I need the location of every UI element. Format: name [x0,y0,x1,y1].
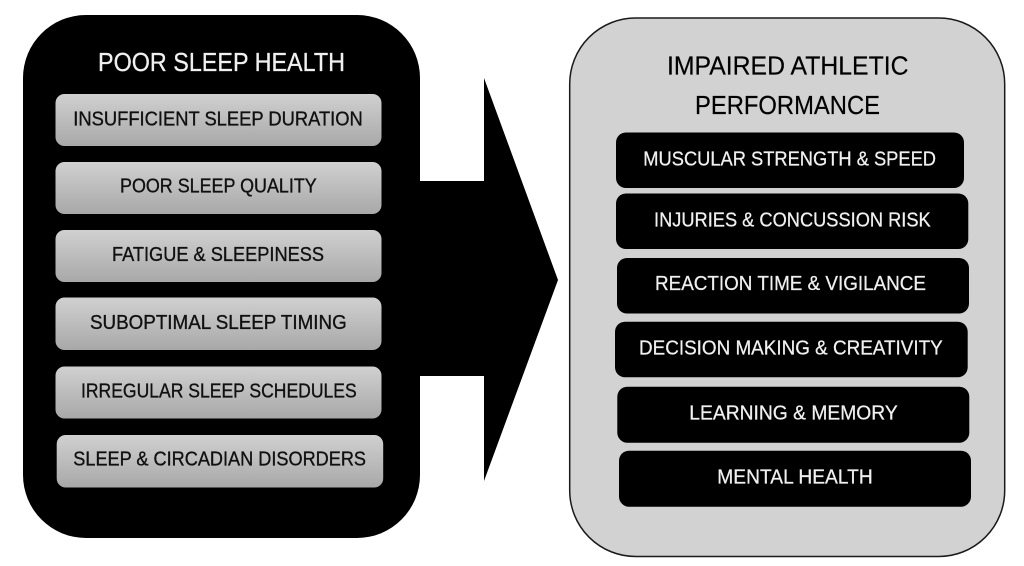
item: injuries and concussion risk: INJURIES & CONCUSSION RISK [654,208,931,231]
item: insufficient sleep duration: INSUFFICIENT SLEEP DURATION [73,108,363,130]
item: sleep and circadian disorders: SLEEP & CIRCADIAN DISORDERS [73,448,366,471]
item: poor sleep quality [56,162,382,214]
item: learning and memory: LEARNING & MEMORY [689,401,898,424]
item: poor sleep quality: POOR SLEEP QUALITY [120,174,317,198]
item: learning and memory [617,387,969,443]
heading: impaired athletic performance [667,50,908,120]
item: decision making and creativity: DECISION MAKING & CREATIVITY [639,336,943,359]
item: decision making and creativity [615,322,968,377]
item: fatigue and sleepiness [56,230,382,282]
item: muscular strength and speed: MUSCULAR STRENGTH & SPEED [643,147,936,170]
arrow [418,78,558,481]
item: irregular sleep schedules: IRREGULAR SLEEP SCHEDULES [81,380,357,403]
item: injuries and concussion risk [616,194,968,249]
item: muscular strength and speed [616,132,964,188]
heading: impaired athletic performance: PERFORMANCE [695,90,880,120]
heading: poor sleep health: POOR SLEEP HEALTH [98,47,345,77]
item: suboptimal sleep timing: SUBOPTIMAL SLEEP TIMING [90,311,347,334]
item: mental health [619,451,971,507]
item: irregular sleep schedules [56,366,382,418]
item: mental health: MENTAL HEALTH [717,466,873,489]
item: insufficient sleep duration [56,94,382,146]
item: suboptimal sleep timing [56,298,382,350]
item: reaction time and vigilance: REACTION TIME & VIGILANCE [655,272,926,295]
item: reaction time and vigilance [617,258,969,314]
panel: impaired athletic performance [570,18,1005,556]
item: fatigue and sleepiness: FATIGUE & SLEEPINESS [112,243,324,266]
item: sleep and circadian disorders [57,435,383,488]
heading: impaired athletic performance: IMPAIRED ATHLETIC [667,50,908,80]
